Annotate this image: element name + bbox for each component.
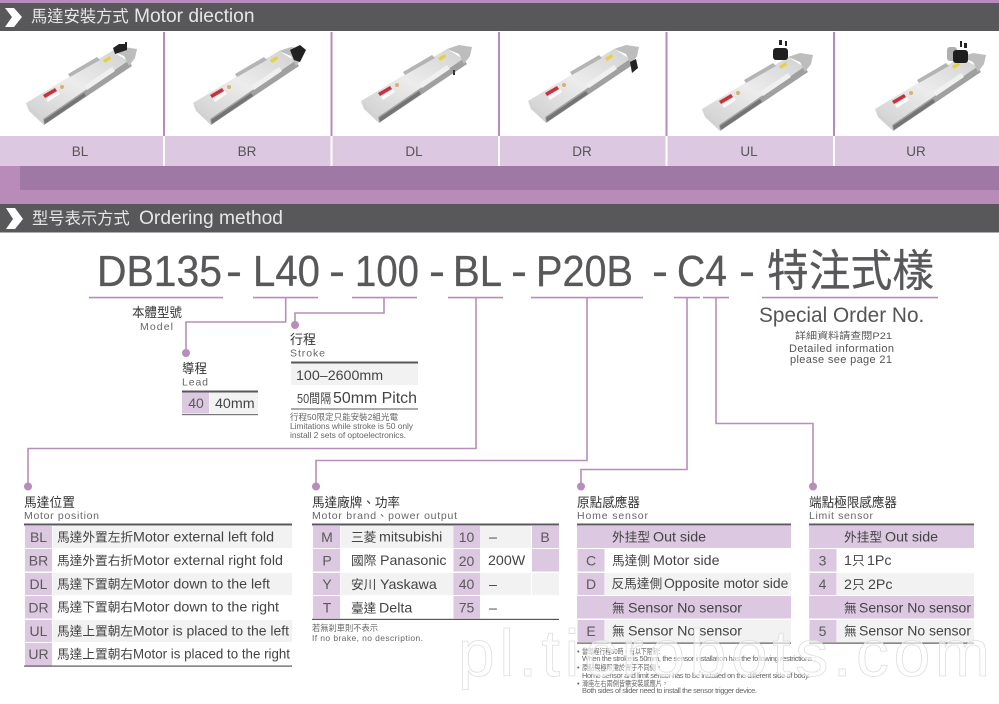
panel: motor brand and power: 若無刹車則不表示 (312, 623, 378, 633)
panel: home sensor: 外挂型 (612, 530, 650, 544)
panel: limit sensor: Sensor No sensor (859, 600, 971, 616)
panel: motor position: UR (28, 646, 49, 662)
model code line: C4 (677, 247, 727, 296)
model code line (97, 247, 934, 296)
text: model label (132, 305, 182, 333)
label: BL: BL (72, 144, 89, 159)
panel: motor position: 馬達外置右折 (57, 554, 133, 568)
panel: motor brand and power: 三菱 (351, 530, 377, 544)
text: special order (759, 304, 924, 366)
notes: sensor restrictions: • (577, 679, 580, 688)
panel: motor brand and power: If no brake, no description. (312, 633, 423, 643)
text: special order: please see page 21 (790, 354, 892, 366)
notes: sensor restrictions (577, 646, 816, 695)
label: BR: BR (238, 144, 257, 159)
panel: stroke: Stroke (290, 348, 325, 360)
label: UR: UR (906, 144, 926, 159)
panel: motor brand and power: Delta (379, 600, 412, 616)
panel: motor position: Motor down to the left (133, 576, 270, 592)
panel: limit sensor: 1只 (844, 553, 865, 569)
panel: motor brand and power (312, 495, 559, 643)
panel: stroke (290, 332, 418, 440)
panel: stroke: Limitations while stroke is 50 only (290, 421, 414, 431)
panel: motor position: UL (30, 623, 48, 639)
panel: lead: 40 (188, 395, 204, 411)
label: DL: DL (405, 144, 423, 159)
model code line: DB135 (97, 247, 222, 296)
text: special order: Detailed information (789, 343, 894, 355)
watermark: pl.ticrobots.com (458, 616, 990, 690)
top strip (0, 0, 999, 3)
panel: motor position: 馬達上置朝左 (57, 624, 133, 638)
panel: limit sensor: Out side (885, 530, 938, 546)
panel: motor brand and power: 10 (459, 529, 474, 545)
panel: motor position: Motor external left fold (133, 530, 274, 546)
heading text: ordering method: 型号表示方式 (32, 210, 130, 228)
panel: home sensor: Sensor No sensor (628, 600, 742, 616)
notes: sensor restrictions: 滑座左右兩側皆需安裝感應片， (582, 678, 668, 688)
panel: motor position: DR (28, 600, 49, 616)
icon: chevron (5, 8, 22, 27)
panel: motor brand and power: 200W (488, 553, 526, 569)
panel: home sensor: C (586, 552, 596, 568)
notes: sensor restrictions: • (577, 647, 580, 656)
panel: motor brand and power: Motor brand、power output (312, 510, 457, 522)
panel: motor position: Motor external right fold (133, 553, 283, 569)
image: actuator BL (26, 42, 137, 125)
panel: motor position: BL (30, 529, 47, 545)
panel: motor brand and power: 國際 (351, 554, 377, 568)
panel: home sensor: 無 (612, 624, 625, 638)
panel: limit sensor: 端點極限感應器 (809, 495, 897, 510)
panel: motor brand and power: T (323, 600, 332, 616)
model code line: - (652, 247, 668, 296)
header: motor direction (0, 3, 999, 31)
connector lines and underlines (24, 298, 938, 490)
panel: motor brand and power: 20 (459, 553, 474, 569)
panel: lead: Lead (182, 376, 208, 388)
panel: stroke: 50間隔 (297, 391, 331, 406)
image: actuator UL (702, 40, 813, 131)
panel: limit sensor: 外挂型 (844, 530, 882, 544)
panel: motor position: Motor is placed to the right (133, 646, 290, 662)
model code line: P20B (536, 247, 633, 296)
panel: motor position: 馬達下置朝右 (57, 600, 133, 614)
image: actuator DR (528, 45, 639, 123)
panel: home sensor: Opposite motor side (664, 575, 789, 591)
panel: home sensor: D (586, 576, 596, 592)
text: special order: Special Order No. (759, 304, 924, 327)
panel: motor position: 馬達外置左折 (57, 530, 133, 544)
label: UL: UL (740, 144, 758, 159)
notes: sensor restrictions: Both sides of slider need to install the sensor trigger device. (582, 686, 757, 695)
panel: home sensor: Home sensor (577, 510, 648, 522)
panel: motor position: 馬達下置朝左 (57, 578, 133, 592)
icon: chevron (6, 208, 23, 229)
image: actuator DL (361, 45, 472, 123)
model code line: L40 (253, 247, 320, 296)
panel: lead: 導程 (182, 361, 207, 376)
model code line: 100 (355, 247, 419, 296)
panel: motor brand and power: – (489, 577, 497, 593)
purple divider band (0, 166, 999, 204)
heading text: motor direction: Motor diection (134, 6, 255, 27)
model code line: - (429, 247, 445, 296)
panel: motor brand and power: P (322, 552, 332, 568)
panel: motor brand and power: – (489, 600, 497, 616)
panel: motor position: Motor is placed to the left (133, 624, 289, 640)
panel: home sensor: Out side (653, 530, 706, 546)
notes: sensor restrictions: Home sensor and limit sensor has to be installed on the different side of body. (582, 671, 810, 680)
panel: motor brand and power: 臺達 (351, 602, 377, 616)
image: actuator UR (875, 41, 986, 131)
text: model label: Model (140, 321, 173, 333)
panel: limit sensor: 2只 (844, 577, 865, 593)
notes: sensor restrictions: When the stroke is 50mm, the sensor installation has the following restrictions : (582, 654, 816, 663)
notes: sensor restrictions: 原點與極限需於置于不同側。 (582, 662, 662, 672)
panel: motor position: 馬達位置 (24, 495, 75, 510)
model code line: - (739, 247, 755, 296)
panel: home sensor: 反馬達側 (612, 577, 662, 591)
panel: lead (182, 361, 258, 415)
panel: motor brand and power: 馬達廠牌、功率 (312, 495, 400, 510)
panel: limit sensor: 2Pc (868, 577, 893, 593)
panel: motor brand and power: 安川 (351, 578, 376, 592)
panel: stroke: 50mm Pitch (333, 390, 417, 407)
panel: home sensor: Motor side (653, 553, 720, 569)
panel: stroke: 行程 (290, 332, 316, 347)
text: special order: 詳細資料請查閱P21 (795, 330, 892, 342)
panel: home sensor: 馬達側 (612, 554, 650, 568)
panel: motor direction grid (0, 32, 999, 166)
header: ordering method (0, 204, 999, 232)
panel: motor brand and power: 40 (459, 576, 474, 592)
panel: motor brand and power: – (489, 530, 497, 546)
panel: motor position: BR (29, 552, 48, 568)
label: DR: DR (572, 144, 592, 159)
panel: motor brand and power: Y (322, 576, 332, 592)
panel: stroke: install 2 sets of optoelectronics. (290, 430, 406, 440)
panel: limit sensor: 3 (819, 552, 827, 568)
notes: sensor restrictions: 當導程行程50時，有以下限制: (582, 646, 660, 656)
panel: limit sensor: Sensor No sensor (859, 624, 971, 640)
panel: motor position: DL (30, 576, 48, 592)
panel: limit sensor: Limit sensor (809, 510, 874, 522)
panel: limit sensor: 5 (819, 623, 827, 639)
image: actuator BR (193, 45, 306, 125)
panel: motor brand and power: M (321, 529, 333, 545)
model code line: BL (453, 247, 502, 296)
panel: motor brand and power: Yaskawa (380, 577, 437, 593)
panel: motor position: Motor down to the right (133, 600, 279, 616)
panel: stroke: 行程50限定只能安裝2組光電 (290, 412, 398, 422)
model code line: 特注式樣 (767, 247, 934, 296)
panel: limit sensor (809, 495, 974, 644)
panel: home sensor: E (586, 623, 596, 639)
panel: motor position: Motor position (24, 510, 99, 522)
panel: home sensor: 無 (612, 602, 625, 616)
panel: lead: 40mm (215, 396, 255, 412)
heading text: motor direction: 馬達安裝方式 (31, 8, 129, 26)
model code line: - (329, 247, 345, 296)
panel: motor brand and power: 75 (459, 600, 474, 616)
heading text: ordering method: Ordering method (139, 208, 283, 229)
panel: limit sensor: 無 (844, 602, 857, 616)
panel: motor position: 馬達上置朝右 (57, 648, 133, 662)
panel: motor brand and power: B (540, 529, 550, 545)
panel: home sensor: Sensor No sensor (628, 624, 742, 640)
text: model label: 本體型號 (132, 305, 182, 320)
model code line: - (511, 247, 527, 296)
panel: home sensor: 原點感應器 (577, 495, 640, 510)
panel: motor brand and power: Panasonic (380, 553, 447, 569)
panel: home sensor (577, 495, 791, 644)
notes: sensor restrictions: • (577, 663, 580, 672)
panel: motor brand and power: mitsubishi (379, 530, 442, 546)
panel: motor position (24, 495, 292, 667)
panel: limit sensor: 無 (844, 624, 857, 638)
model code line: - (226, 247, 242, 296)
panel: limit sensor: 1Pc (867, 553, 892, 569)
panel: stroke: 100–2600mm (296, 368, 383, 384)
panel: limit sensor: 4 (819, 576, 827, 592)
